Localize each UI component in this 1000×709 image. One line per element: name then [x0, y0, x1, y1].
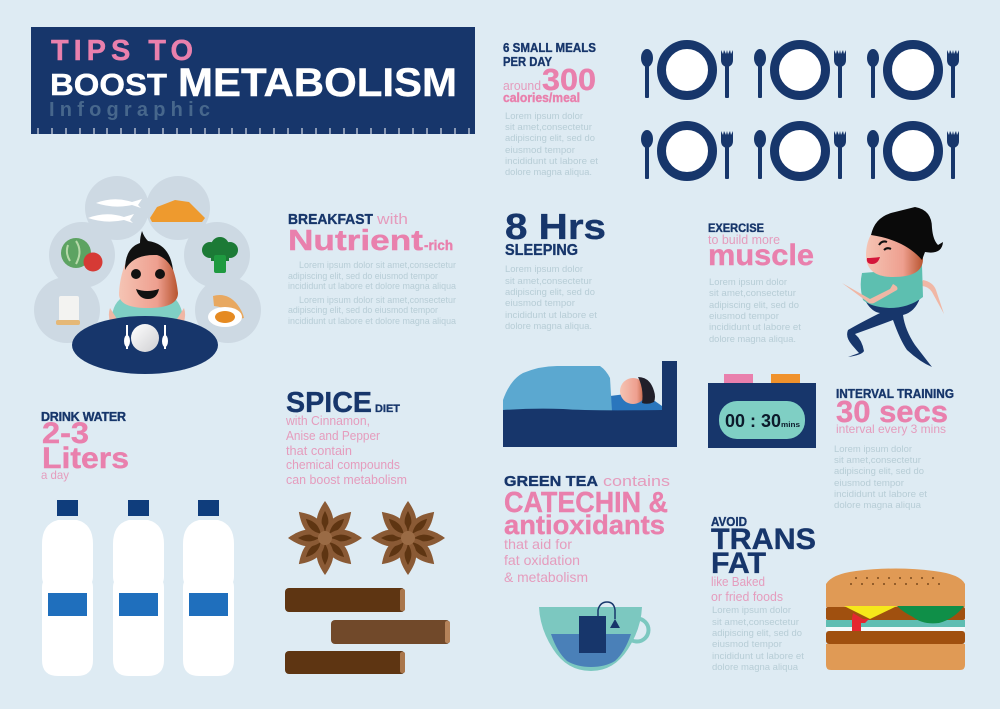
text block: breakfast: -rich — [424, 237, 453, 253]
text block: six small meals: sit amet,consectetur — [505, 122, 592, 133]
text block: exercise: EXERCISE — [708, 221, 764, 235]
text block: exercise — [708, 221, 814, 345]
text block: exercise: to build more — [708, 232, 780, 247]
text block: green tea: & metabolism — [504, 569, 588, 585]
text block: six small meals: calories/meal — [503, 90, 580, 105]
text block: avoid trans fat — [711, 514, 816, 673]
text block: breakfast: Lorem ipsum dolor sit amet,consectetur — [299, 295, 456, 306]
text block: six small meals: PER DAY — [503, 54, 552, 69]
subtitle: infographic: Infographic — [49, 99, 210, 121]
text block: sleeping: adipiscing elit, sed do — [505, 287, 595, 298]
illustration: burger — [826, 568, 965, 670]
text block: six small meals: around — [503, 78, 541, 93]
illustration: timer: mins — [781, 422, 800, 429]
text block: exercise: muscle — [708, 239, 814, 272]
icon: cabbage and tomato — [61, 238, 102, 272]
text block: green tea: CATECHIN & — [504, 487, 668, 519]
text block: sleeping: sit amet,consectetur — [505, 276, 592, 287]
text block: exercise: adipiscing elit, sed do — [709, 300, 799, 311]
text block: interval training: 30 secs — [836, 394, 948, 429]
text block: avoid trans fat: FAT — [711, 547, 766, 580]
text block: spice diet: that contain — [286, 443, 352, 458]
text block: breakfast: BREAKFAST — [288, 211, 373, 228]
text block: avoid trans fat: Lorem ipsum dolor — [712, 605, 791, 616]
text block: six small meals: dolore magna aliqua. — [505, 167, 592, 178]
icon: orange pastry — [150, 200, 205, 222]
illustration: timer: 00 : 30 — [725, 411, 781, 431]
text block: spice diet: with Cinnamon, — [285, 413, 370, 428]
illustration: tea cup — [539, 602, 648, 671]
text block: avoid trans fat: eiusmod tempor — [712, 639, 782, 650]
text block: six small meals: Lorem ipsum dolor — [505, 111, 583, 122]
text block: exercise: Lorem ipsum dolor — [709, 277, 787, 288]
text block: green tea: that aid for — [504, 536, 572, 552]
text block: avoid trans fat: TRANS — [711, 523, 816, 556]
icons: three water bottles — [42, 500, 234, 676]
text block: breakfast: with — [376, 211, 408, 228]
icons: cinnamon sticks — [285, 588, 450, 674]
text block: drink water: DRINK WATER — [41, 410, 126, 424]
text block: green tea: fat oxidation — [504, 552, 580, 568]
text block: six small meals: eiusmod tempor — [505, 145, 575, 156]
text block: breakfast: incididunt ut labore et dolore magna aliqua — [288, 281, 457, 292]
text block: avoid trans fat: or fried foods — [711, 589, 783, 604]
text block: drink water: a day — [41, 468, 69, 482]
text block: six small meals: adipiscing elit, sed do — [505, 133, 595, 144]
text block: sleeping: SLEEPING — [505, 242, 578, 259]
text block: avoid trans fat: sit amet,consectetur — [712, 617, 799, 628]
icon: broccoli — [202, 237, 238, 273]
title: tips to: TIPS TO — [51, 35, 193, 67]
title: boost metabolism: BOOST — [50, 67, 167, 102]
table — [72, 316, 218, 374]
illustration: timer — [708, 374, 816, 448]
text block: avoid trans fat: incididunt ut labore et — [712, 651, 804, 662]
text block: interval training: INTERVAL TRAINING — [836, 387, 954, 401]
text block: exercise: eiusmod tempor — [709, 311, 779, 322]
text block: avoid trans fat: dolore magna aliqua — [712, 662, 799, 673]
icons: six plates — [641, 44, 959, 179]
text block: sleeping: incididunt ut labore et — [505, 310, 597, 321]
text block: interval training: adipiscing elit, sed do — [834, 466, 924, 477]
text block: breakfast: adipiscing elit, sed do eiusmod tempor — [288, 271, 438, 282]
text block: six small meals: 6 SMALL MEALS — [503, 40, 596, 55]
illustration: running woman — [842, 207, 944, 367]
text block: interval training: incididunt ut labore et — [834, 489, 927, 500]
text block: green tea: contains — [603, 473, 670, 490]
text block: green tea: antioxidants — [504, 510, 665, 540]
text block: avoid trans fat: AVOID — [711, 514, 747, 529]
icons: star anise — [288, 501, 445, 575]
text block: sleeping — [505, 206, 606, 332]
text block: spice diet: SPICE — [286, 387, 372, 419]
text block: six small meals: incididunt ut labore et — [505, 156, 598, 167]
text block: interval training: dolore magna aliqua — [834, 500, 922, 511]
text block: breakfast: incididunt ut labore et dolore magna aliqua — [288, 316, 457, 327]
text block: green tea: GREEN TEA — [504, 473, 598, 490]
title: boost metabolism — [50, 61, 457, 105]
text block: spice diet: DIET — [375, 403, 400, 415]
text block: interval training: interval every 3 mins — [836, 422, 946, 436]
text block: exercise: sit amet,consectetur — [709, 288, 796, 299]
icon: glass of milk — [56, 296, 80, 325]
text block: avoid trans fat: like Baked — [711, 574, 765, 589]
text block: spice diet — [285, 387, 407, 487]
text block: exercise: dolore magna aliqua. — [709, 334, 796, 345]
text block: avoid trans fat: adipiscing elit, sed do — [712, 628, 802, 639]
text block: breakfast: Lorem ipsum dolor sit amet,consectetur — [299, 260, 456, 271]
illustration: breakfast character with food — [34, 176, 261, 374]
text block: six small meals: 300 — [542, 62, 596, 97]
food circles — [34, 176, 261, 343]
title: boost metabolism: METABOLISM — [178, 61, 457, 105]
text block: sleeping: 8 Hrs — [505, 206, 606, 247]
text block: green tea — [504, 473, 670, 585]
text block: sleeping: eiusmod tempor — [505, 298, 575, 309]
text block: interval training: sit amet,consectetur — [834, 455, 921, 466]
text block: spice diet: can boost metabolism — [286, 472, 407, 487]
text block: interval training: Lorem ipsum dolor — [834, 444, 912, 455]
text block: breakfast: Nutrient — [288, 225, 423, 257]
text block: breakfast: adipiscing elit, sed do eiusmod tempor — [288, 305, 438, 316]
title banner — [31, 27, 475, 134]
text block: sleeping: dolore magna aliqua. — [505, 321, 592, 332]
character: boy — [109, 231, 185, 332]
text block: interval training — [834, 387, 954, 511]
icon: fish — [88, 199, 142, 223]
text block: drink water — [41, 410, 129, 482]
text block: spice diet: chemical compounds — [286, 457, 400, 472]
text block: sleeping: Lorem ipsum dolor — [505, 264, 583, 275]
text block: exercise: incididunt ut labore et — [709, 322, 801, 333]
illustration: person sleeping in bed — [503, 361, 677, 447]
text block: spice diet: Anise and Pepper — [286, 428, 381, 443]
text block: drink water: 2-3 — [42, 417, 89, 450]
icon: plate with cutlery — [124, 324, 168, 352]
text block: drink water: Liters — [42, 442, 129, 475]
text block: interval training: eiusmod tempor — [834, 478, 904, 489]
text block: breakfast — [288, 211, 457, 327]
icon: egg and bread — [208, 295, 244, 327]
text block: six small meals — [503, 40, 598, 178]
